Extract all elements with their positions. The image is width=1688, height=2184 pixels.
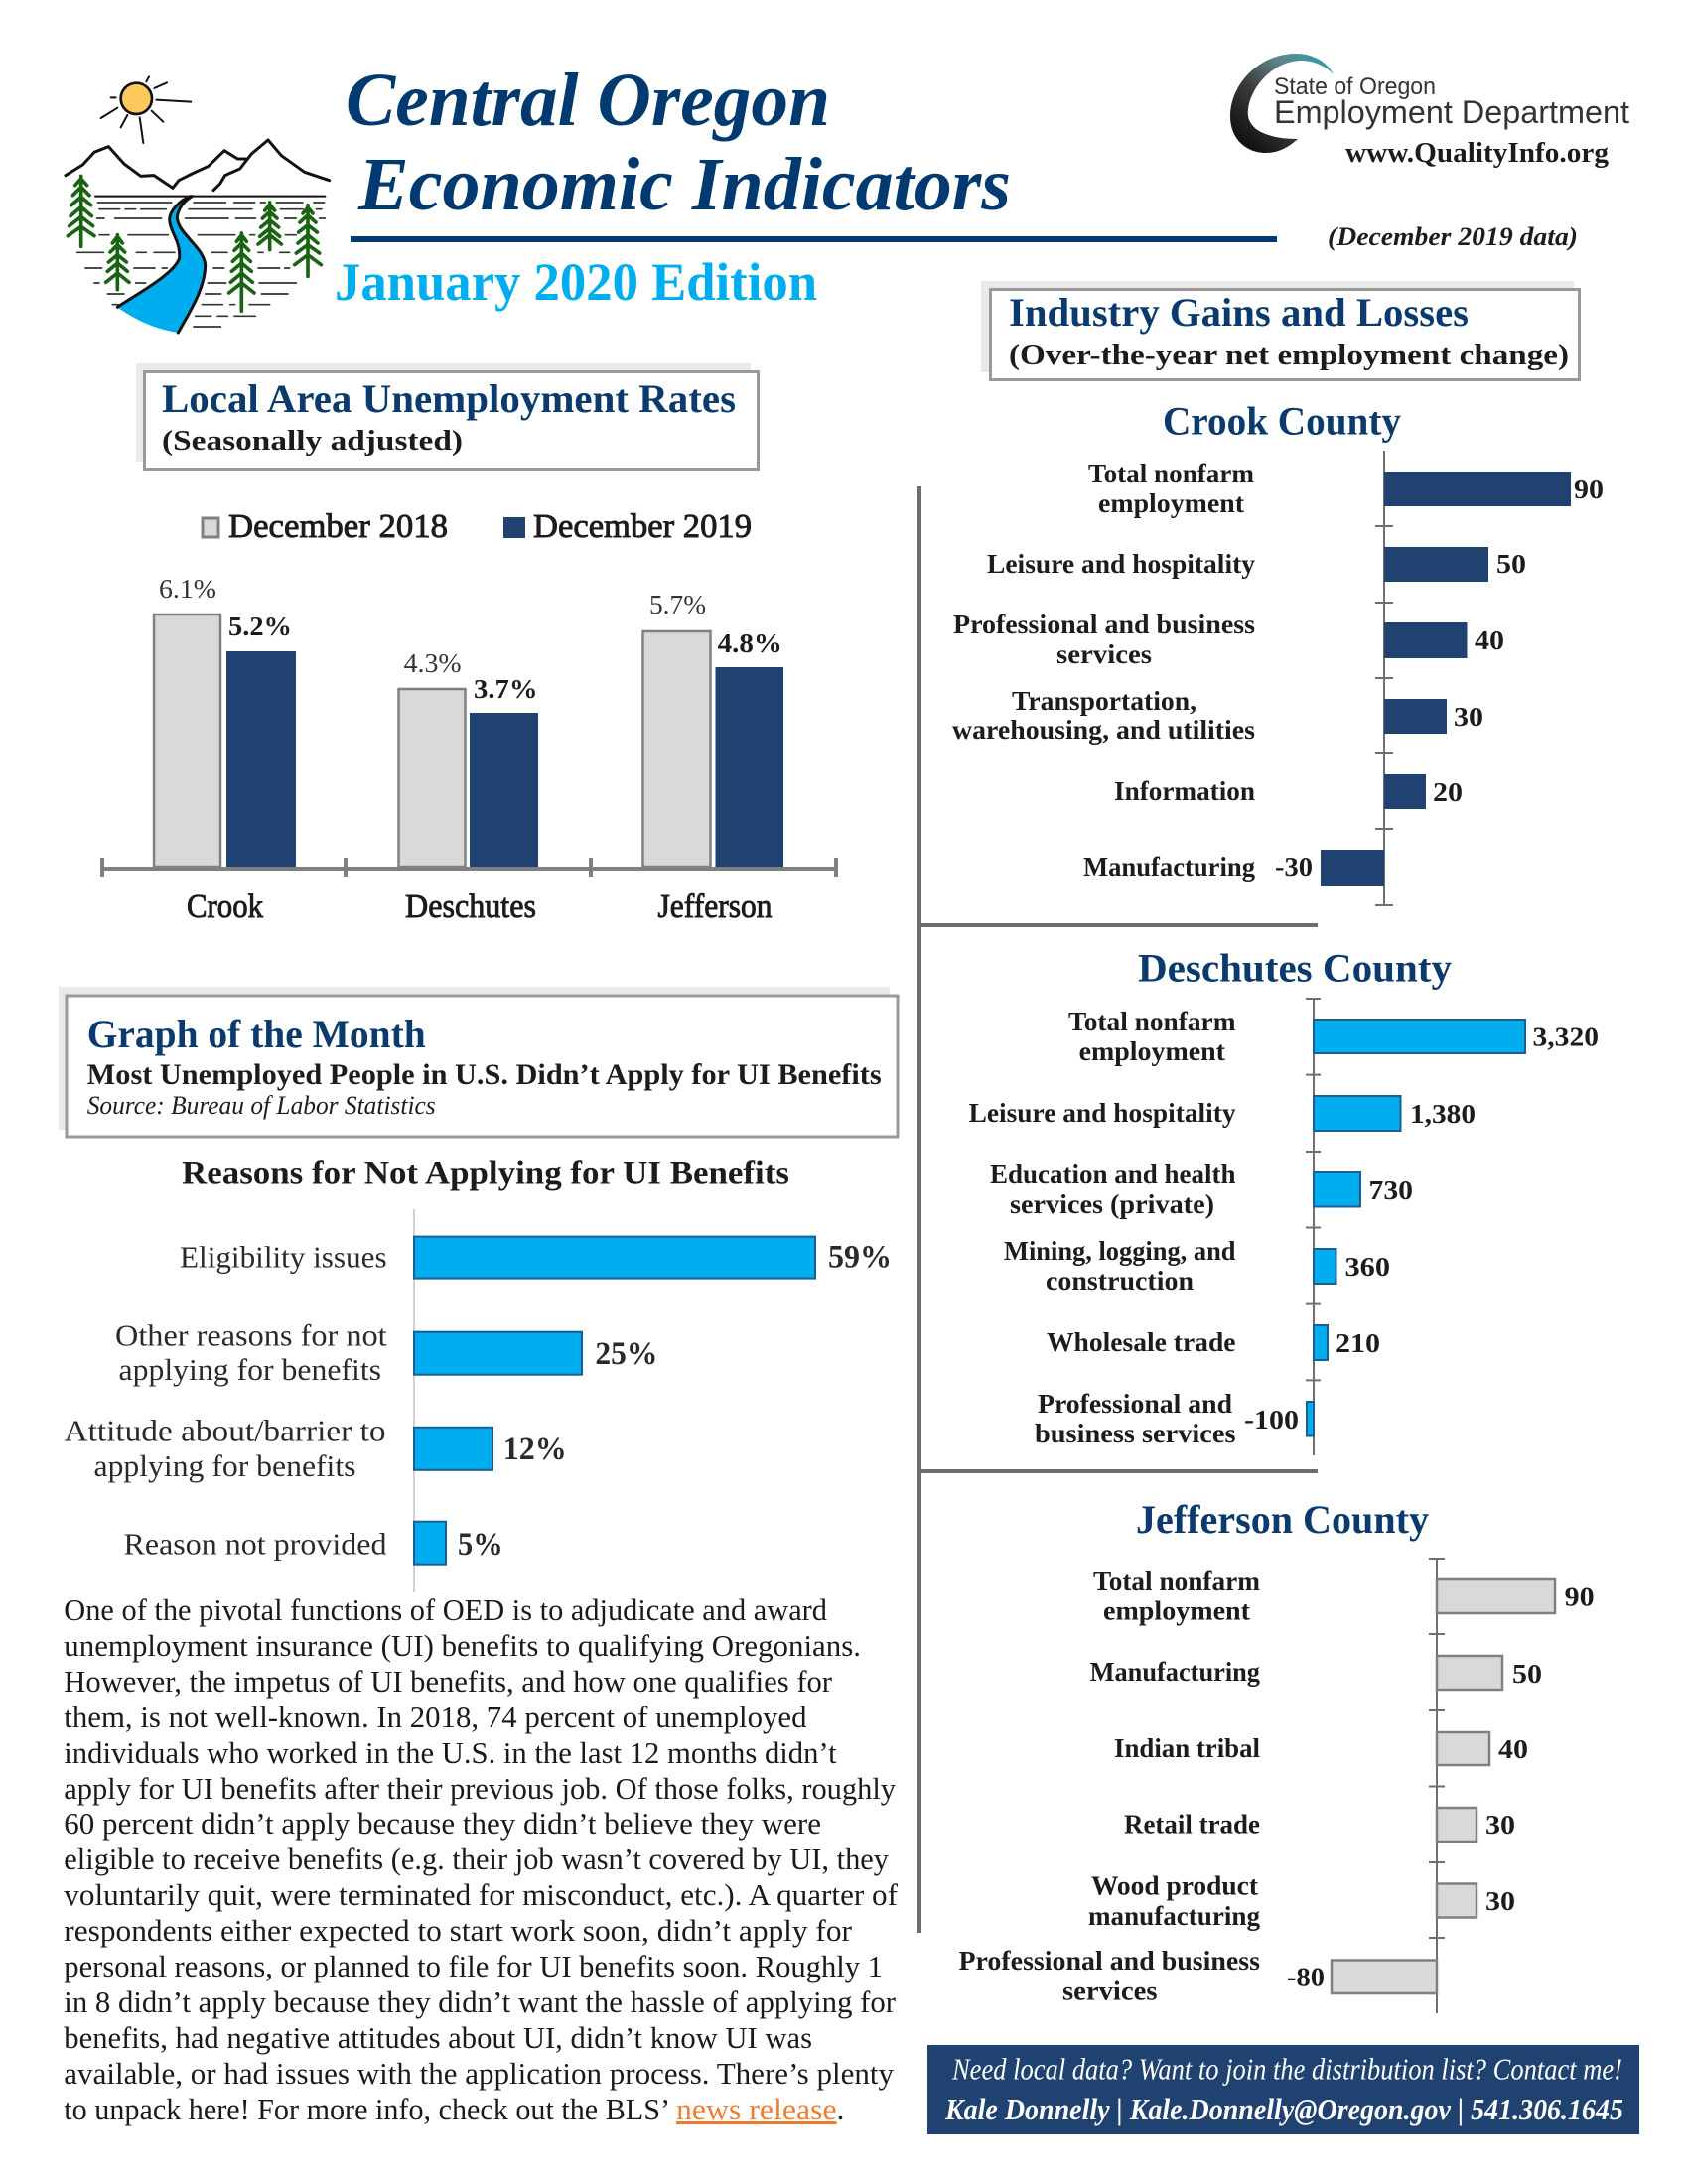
panel: Crook County: warehousing, and utilities xyxy=(952,715,1255,745)
panel: local area unemployment rates heading: Local Area Unemployment Rates xyxy=(162,376,736,421)
bar chart: unemployment rates: Deschutes xyxy=(405,888,536,925)
panel: Jefferson County: services xyxy=(1062,1976,1158,2005)
bar chart: reasons for not applying: 25% xyxy=(595,1336,657,1372)
legend: December 2019 xyxy=(533,508,752,545)
bar chart: reasons for not applying: 5% xyxy=(458,1527,503,1563)
panel: Crook County: Leisure and hospitality xyxy=(987,549,1256,579)
panel: Jefferson County: -80 xyxy=(1287,1963,1325,1992)
panel: Crook County: Manufacturing xyxy=(1083,852,1255,882)
heading: Crook County: Crook County xyxy=(1163,399,1401,443)
text block: UI benefits article: respondents either expected to start work soon, didn’t apply for xyxy=(64,1913,853,1948)
bar chart: reasons for not applying: Other reasons for not xyxy=(115,1318,387,1352)
bar chart: unemployment rates: 6.1% xyxy=(159,574,216,604)
callout: contact footer xyxy=(927,2045,1639,2134)
title: Central Oregon xyxy=(346,59,830,142)
panel: local area unemployment rates heading: (Seasonally adjusted) xyxy=(162,425,463,457)
panel: Jefferson County: 30 xyxy=(1485,1810,1515,1840)
panel: Deschutes County: 360 xyxy=(1344,1252,1390,1282)
panel: graph of the month heading: Most Unemployed People in U.S. Didn’t Apply for UI Benefits xyxy=(87,1058,882,1091)
panel: Crook County: -30 xyxy=(1275,852,1313,882)
text block: UI benefits article: benefits, had negative attitudes about UI, didn’t know UI was xyxy=(64,2020,812,2055)
text block: UI benefits article: them, is not well-known. In 2018, 74 percent of unemployed xyxy=(64,1700,807,1734)
panel: Deschutes County: Education and health xyxy=(990,1160,1235,1189)
chart title: Reasons for Not Applying for UI Benefits xyxy=(182,1157,789,1192)
website link: www.QualityInfo.org xyxy=(1345,137,1609,169)
panel: Jefferson County: Retail trade xyxy=(1124,1809,1260,1839)
legend: December 2018 xyxy=(228,508,448,545)
bar chart: reasons for not applying: 59% xyxy=(828,1239,892,1275)
heading: Jefferson County: Jefferson County xyxy=(1136,1497,1429,1542)
bar chart: unemployment rates: 5.2% xyxy=(228,612,292,641)
bar chart: reasons for not applying: Attitude about/barrier to xyxy=(64,1414,385,1448)
panel: Deschutes County: Total nonfarm xyxy=(1068,1007,1236,1036)
heading: Deschutes County: Deschutes County xyxy=(1138,945,1452,991)
bar chart: unemployment rates xyxy=(102,574,837,925)
text block: UI benefits article: available, or had issues with the application process. There’s plenty xyxy=(64,2056,894,2091)
panel: Jefferson County: employment xyxy=(1103,1596,1250,1626)
text block: UI benefits article: to unpack here! For more info, check out the BLS’ xyxy=(64,2092,670,2126)
panel: Jefferson County: Wood product xyxy=(1091,1870,1258,1900)
title rule xyxy=(351,236,1277,242)
panel: Deschutes County: services (private) xyxy=(1010,1189,1214,1219)
icon: Employment Department logo: State of Oregon xyxy=(1274,73,1436,100)
text block: UI benefits article: apply for UI benefits after their previous job. Of those folks, roughly xyxy=(64,1771,896,1806)
panel: Crook County: 40 xyxy=(1475,625,1504,655)
panel: Deschutes County: construction xyxy=(1046,1266,1194,1296)
panel: Deschutes County: Professional and xyxy=(1038,1389,1232,1419)
callout: contact footer: Kale Donnelly | Kale.Donnelly@Oregon.gov | 541.306.1645 xyxy=(944,2092,1623,2126)
panel: industry gains and losses heading xyxy=(981,281,1579,379)
panel: Jefferson County: 50 xyxy=(1512,1659,1542,1689)
panel: Deschutes County: Leisure and hospitality xyxy=(969,1098,1236,1128)
panel: Jefferson County xyxy=(959,1497,1595,2013)
icon: Employment Department logo: Employment Department xyxy=(1274,94,1629,130)
bar chart: reasons for not applying xyxy=(64,1157,892,1592)
bar chart: unemployment rates: 4.8% xyxy=(718,628,782,658)
bar chart: unemployment rates: 5.7% xyxy=(649,590,706,619)
panel: graph of the month heading xyxy=(59,987,898,1137)
text block: UI benefits article: news release xyxy=(676,2092,837,2126)
icon: Employment Department logo xyxy=(1230,54,1629,153)
panel: Crook County: Total nonfarm xyxy=(1088,459,1255,488)
panel: Deschutes County xyxy=(969,945,1599,1455)
bar chart: unemployment rates: 4.3% xyxy=(404,648,462,678)
bar chart: reasons for not applying: applying for benefits xyxy=(93,1448,355,1483)
panel: Crook County: 20 xyxy=(1433,777,1463,807)
panel: Jefferson County: 40 xyxy=(1498,1734,1528,1764)
panel: graph of the month heading: Source: Bureau of Labor Statistics xyxy=(87,1091,436,1120)
panel: industry gains and losses heading: (Over-the-year net employment change) xyxy=(1009,340,1569,371)
panel: Crook County: Information xyxy=(1114,776,1255,806)
text block: UI benefits article: voluntarily quit, were terminated for misconduct, etc.). A quarter of xyxy=(64,1877,899,1912)
text block: UI benefits article: unemployment insurance (UI) benefits to qualifying Oregonians. xyxy=(64,1628,861,1663)
panel: industry gains and losses heading: Industry Gains and Losses xyxy=(1009,290,1469,335)
panel: Crook County: employment xyxy=(1098,488,1244,518)
panel: Jefferson County: Manufacturing xyxy=(1090,1657,1260,1687)
panel: Jefferson County: Professional and business xyxy=(959,1946,1260,1976)
text block: UI benefits article: eligible to receive benefits (e.g. their job wasn’t covered by UI, they xyxy=(64,1842,889,1876)
text block: UI benefits article xyxy=(64,1592,899,2126)
panel: Crook County: Professional and business xyxy=(953,610,1255,639)
bar chart: reasons for not applying: Reason not provided xyxy=(123,1527,387,1561)
panel: Deschutes County: -100 xyxy=(1244,1405,1299,1434)
panel: local area unemployment rates heading xyxy=(136,363,759,469)
panel: Deschutes County: 3,320 xyxy=(1533,1023,1599,1052)
bar chart: unemployment rates: 3.7% xyxy=(474,674,538,704)
text block: UI benefits article: . xyxy=(837,2092,844,2126)
title: Economic Indicators xyxy=(357,143,1011,226)
panel: Jefferson County: Total nonfarm xyxy=(1093,1567,1261,1596)
legend xyxy=(203,508,752,545)
panel: Crook County: services xyxy=(1056,639,1152,669)
text block: UI benefits article: individuals who worked in the U.S. in the last 12 months didn’t xyxy=(64,1735,837,1770)
panel: Crook County: 90 xyxy=(1574,475,1604,504)
panel: Crook County: 30 xyxy=(1454,702,1483,732)
bar chart: reasons for not applying: Eligibility issues xyxy=(180,1239,387,1274)
panel: Crook County: 50 xyxy=(1496,549,1526,579)
edition heading: January 2020 Edition xyxy=(335,252,817,312)
bar chart: unemployment rates: Crook xyxy=(187,888,263,925)
panel: Deschutes County: employment xyxy=(1079,1036,1225,1066)
panel: Jefferson County: 30 xyxy=(1485,1886,1515,1916)
panel: Deschutes County: 1,380 xyxy=(1410,1099,1476,1129)
text block: UI benefits article: in 8 didn’t apply because they didn’t want the hassle of applying for xyxy=(64,1984,897,2019)
column dividers xyxy=(919,486,1318,1933)
bar chart: reasons for not applying: applying for benefits xyxy=(119,1352,381,1387)
panel: Deschutes County: business services xyxy=(1035,1419,1235,1448)
bar chart: unemployment rates: Jefferson xyxy=(657,888,773,925)
text block: UI benefits article: 60 percent didn’t apply because they didn’t believe they were xyxy=(64,1806,821,1841)
panel: Crook County xyxy=(952,399,1604,905)
text block: UI benefits article: One of the pivotal functions of OED is to adjudicate and award xyxy=(64,1592,827,1627)
data date: (December 2019 data) xyxy=(1328,222,1578,251)
icon: sun, mountains, river and trees logo xyxy=(66,76,330,333)
bar chart: reasons for not applying: 12% xyxy=(503,1432,567,1467)
panel: Deschutes County: 210 xyxy=(1336,1328,1380,1358)
text block: UI benefits article: However, the impetus of UI benefits, and how one qualifies for xyxy=(64,1664,833,1699)
panel: Jefferson County: 90 xyxy=(1565,1582,1595,1612)
panel: graph of the month heading: Graph of the Month xyxy=(87,1012,426,1056)
panel: Jefferson County: manufacturing xyxy=(1088,1901,1260,1931)
panel: Deschutes County: Mining, logging, and xyxy=(1004,1236,1235,1266)
title xyxy=(346,59,1011,226)
panel: Deschutes County: 730 xyxy=(1368,1175,1413,1205)
text block: UI benefits article: personal reasons, or planned to file for UI benefits soon. Roughly 1 xyxy=(64,1949,883,1983)
panel: Jefferson County: Indian tribal xyxy=(1114,1733,1260,1763)
panel: Deschutes County: Wholesale trade xyxy=(1047,1327,1236,1357)
panel: Crook County: Transportation, xyxy=(1012,686,1196,716)
